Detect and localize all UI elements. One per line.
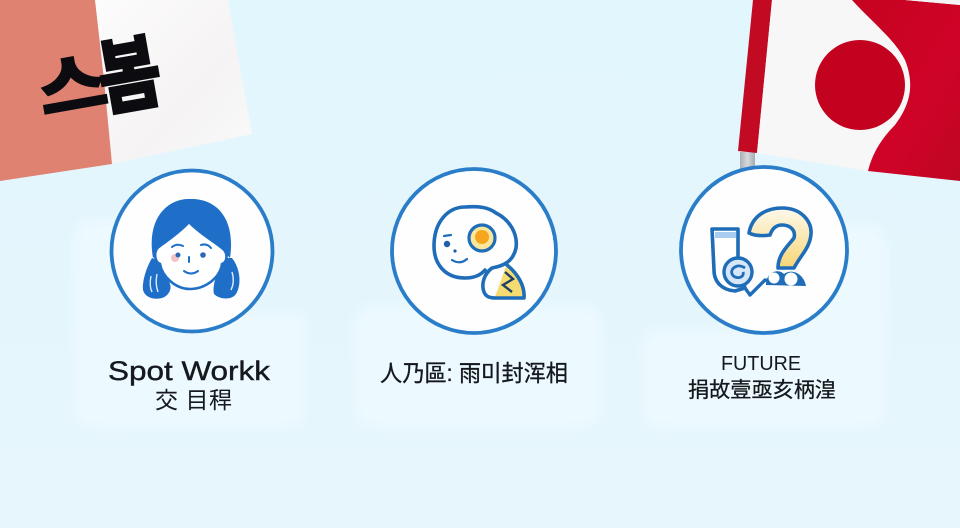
earmuffs [143, 258, 171, 299]
text: future label [688, 353, 836, 402]
cheek [171, 254, 179, 262]
icon: cup and question mark [681, 167, 847, 333]
text: middle label: 人乃區: 雨미封浑相 [380, 360, 568, 386]
speech tail [745, 280, 772, 295]
panel: future card [642, 225, 885, 428]
right flag [738, 0, 960, 181]
snail spiral [724, 258, 752, 286]
left flag [0, 0, 252, 181]
face details [444, 241, 450, 247]
flag lettering [31, 27, 168, 137]
flag pole [740, 152, 755, 172]
flag lettering: 봄 [91, 27, 168, 126]
head outline [434, 207, 524, 298]
question mark [749, 208, 811, 268]
icon: head with coin and bolt [392, 169, 556, 333]
red sun [815, 40, 905, 130]
hair [152, 199, 231, 258]
heading: Spot Work [108, 356, 271, 413]
heading: Spot Work: Spot Workk [108, 356, 271, 386]
panel: spot work card [75, 220, 306, 428]
earmuff highlights [150, 272, 233, 292]
text: future label: FUTURE [721, 353, 801, 375]
face [155, 222, 226, 289]
icon: woman with headphones [112, 170, 272, 332]
subtitle 3: 捐故壹亟亥柄湟 [688, 379, 836, 402]
eyes and mouth [172, 244, 211, 274]
cup [712, 229, 745, 291]
yellow bolt [495, 266, 525, 297]
subtitle 1: 交 目稈 [155, 387, 232, 413]
panel: middle card [354, 305, 602, 428]
flag lettering: 스 [33, 44, 113, 129]
coin [469, 225, 495, 251]
dots [766, 271, 806, 286]
